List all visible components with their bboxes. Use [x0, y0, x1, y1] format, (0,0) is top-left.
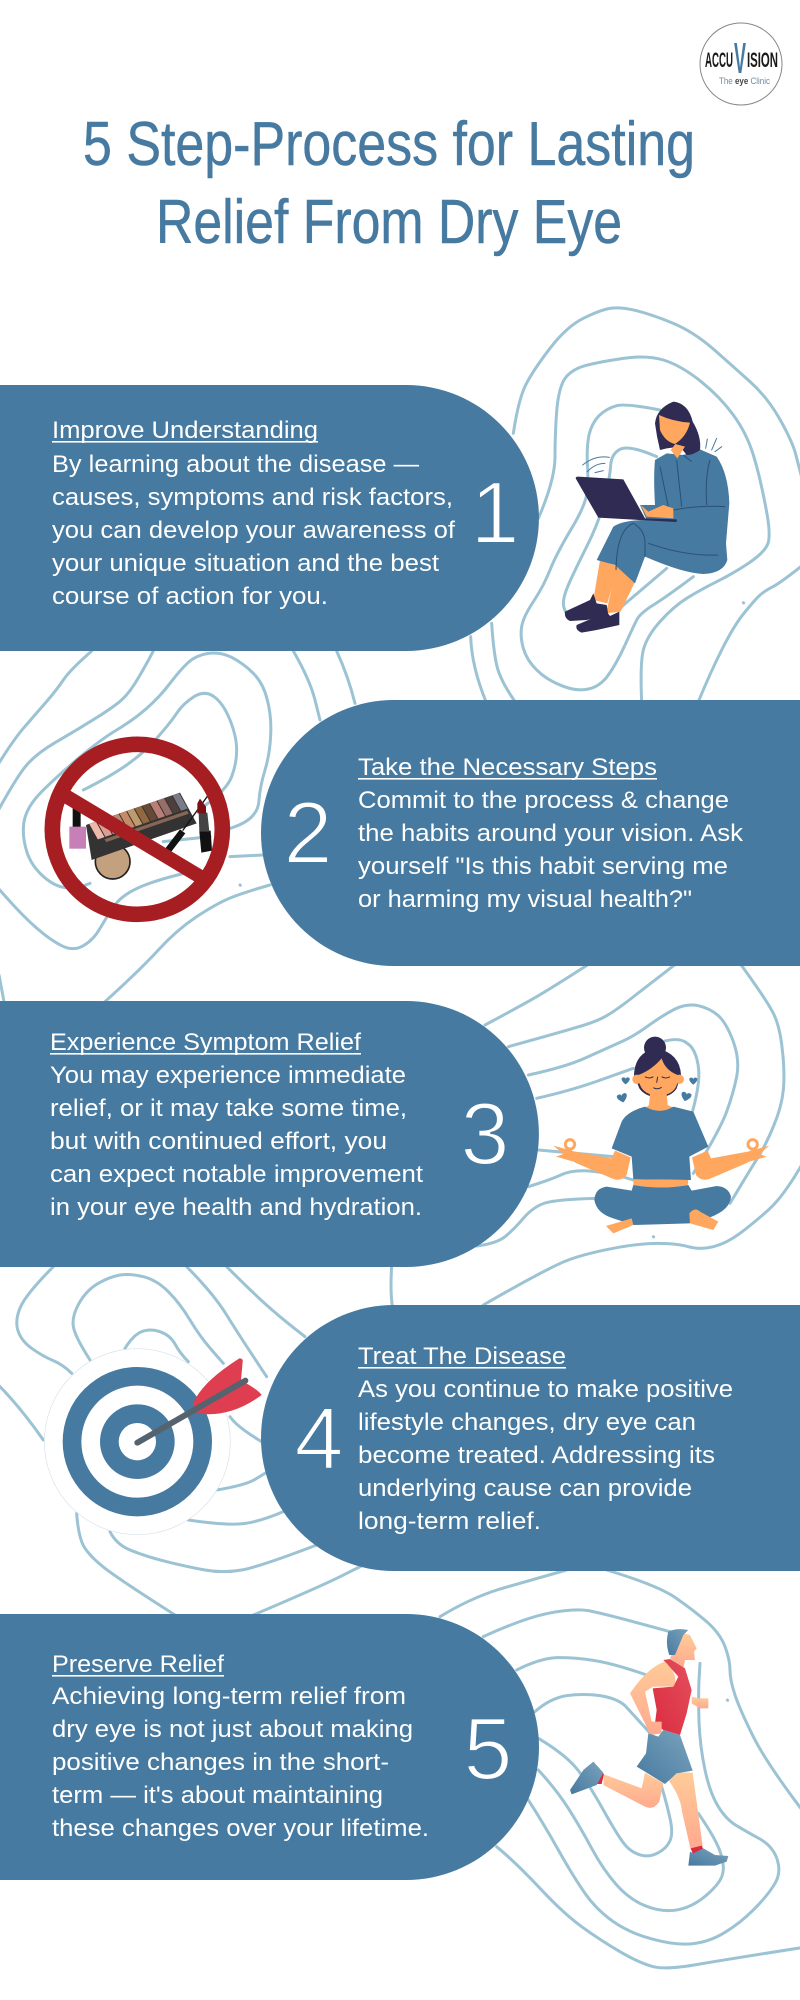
step 1 body text: By learning about the disease —	[52, 451, 419, 478]
step 5 body text: dry eye is not just about making	[52, 1716, 413, 1743]
step 5 body text: these changes over your lifetime.	[52, 1815, 429, 1842]
step 2 body text: the habits around your vision. Ask	[358, 820, 744, 847]
step 4 body text	[358, 1376, 733, 1535]
background contour lines: step 3	[477, 963, 800, 1305]
step 3 body text: You may experience immediate	[50, 1062, 406, 1089]
logo: AccuVision The eye Clinic: ACCU	[705, 49, 733, 72]
icon: meditating woman	[553, 1037, 769, 1233]
panel: step 2 take the necessary steps	[261, 700, 800, 966]
step 3 body text	[50, 1062, 423, 1221]
background contour lines: step 1	[471, 308, 800, 702]
step 4 body text: As you continue to make positive	[358, 1376, 733, 1403]
step 2 body text: or harming my visual health?"	[358, 886, 692, 913]
step 4 number: 4	[295, 1389, 343, 1488]
step 4 body text: become treated. Addressing its	[358, 1442, 715, 1469]
step 2 body text	[358, 787, 744, 913]
step 5 body text	[52, 1683, 429, 1842]
step 4 heading: Treat The Disease	[358, 1343, 566, 1370]
icon: woman working on laptop	[565, 402, 729, 633]
step 1 body text: causes, symptoms and risk factors,	[52, 484, 453, 511]
title: Relief From Dry Eye	[156, 188, 622, 257]
logo: AccuVision The eye Clinic: V	[734, 34, 746, 83]
step 5 heading: Preserve Relief	[52, 1651, 224, 1678]
step 5 body text: Achieving long-term relief from	[52, 1683, 406, 1710]
step 3 body text: relief, or it may take some time,	[50, 1095, 407, 1122]
step 3 number: 3	[461, 1084, 509, 1183]
step 2 body text: yourself "Is this habit serving me	[358, 853, 728, 880]
step 3 body text: can expect notable improvement	[50, 1161, 423, 1188]
step 4 body text: underlying cause can provide	[358, 1475, 692, 1502]
step 1 body text: course of action for you.	[52, 583, 328, 610]
step 1 body text	[52, 451, 455, 610]
step 5 body text: term — it's about maintaining	[52, 1782, 383, 1809]
icon: running man	[570, 1629, 728, 1866]
step 2 body text: Commit to the process & change	[358, 787, 729, 814]
step 5 body text: positive changes in the short-	[52, 1749, 389, 1776]
title: 5 Step-Process for Lasting	[83, 110, 695, 179]
panel: step 4 treat the disease	[261, 1305, 800, 1571]
step 4 body text: lifestyle changes, dry eye can	[358, 1409, 696, 1436]
logo: AccuVision The eye Clinic	[700, 23, 782, 105]
background contour lines: step 4	[0, 1265, 393, 1615]
background contour lines: step 2	[0, 651, 355, 1002]
panel: step 5 preserve relief	[0, 1614, 539, 1880]
panel: step 1 improve understanding	[0, 385, 539, 651]
step 2 heading: Take the Necessary Steps	[358, 754, 657, 781]
title	[83, 110, 695, 257]
background contour lines: step 5	[440, 1570, 800, 1968]
logo: AccuVision The eye Clinic: The eye Clinic	[719, 76, 770, 86]
panel: step 3 experience symptom relief	[0, 1001, 539, 1267]
step 3 body text: but with continued effort, you	[50, 1128, 387, 1155]
step 2 number: 2	[284, 783, 332, 882]
step 1 body text: you can develop your awareness of	[52, 517, 455, 544]
step 5 number: 5	[464, 1699, 512, 1798]
step 1 body text: your unique situation and the best	[52, 550, 439, 577]
step 1 heading: Improve Understanding	[52, 417, 318, 444]
icon: no makeup prohibition sign	[52, 744, 222, 914]
step 4 body text: long-term relief.	[358, 1508, 541, 1535]
step 3 body text: in your eye health and hydration.	[50, 1194, 422, 1221]
step 3 heading: Experience Symptom Relief	[50, 1029, 361, 1056]
icon: target with arrow	[44, 1349, 262, 1535]
step 1 number: 1	[471, 463, 519, 562]
